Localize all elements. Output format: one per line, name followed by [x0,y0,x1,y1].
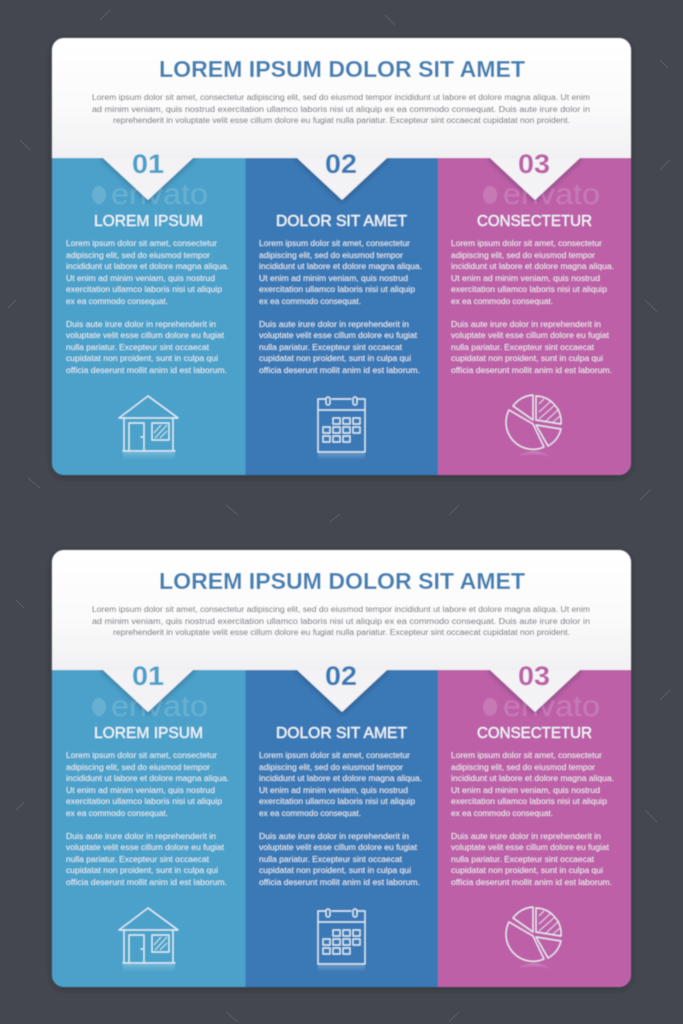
card 2 base [52,550,631,987]
column 1 body text: incididunt ut labore et dolore magna aliqua. [66,774,229,783]
column 1 body text: ex ea commodo consequat. [66,297,168,306]
column 1 heading: LOREM IPSUM [94,725,203,742]
column 1 body text: Lorem ipsum dolor sit amet, consectetur [66,239,217,248]
column 1 body text [66,239,229,375]
pointer 1 [103,662,193,712]
column 1 body text: voluptate velit esse cillum dolore eu fugiat [66,331,225,340]
column 1 body text: ex ea commodo consequat. [66,809,168,818]
title: LOREM IPSUM DOLOR SIT AMET [159,568,526,594]
column 2 body text: ex ea commodo consequat. [259,809,361,818]
icon: pie chart [506,907,561,970]
number 01: 01 [132,661,164,691]
header panel [52,550,631,670]
icon: calendar [318,909,365,972]
column 1 body text: exercitation ullamco laboris nisi ut aliquip [66,285,223,294]
column 2 heading: DOLOR SIT AMET [276,213,407,230]
title: LOREM IPSUM DOLOR SIT AMET [159,56,526,82]
pointer 3 [490,150,580,200]
column 1 body text: Ut enim ad minim veniam, quis nostrud [66,274,215,283]
column 1 body text: cupidatat non proident, sunt in culpa qui [66,866,218,875]
column 1 heading: LOREM IPSUM [94,213,203,230]
number 03: 03 [518,149,550,179]
column 3 body text: ex ea commodo consequat. [451,297,553,306]
column 3 body text: officia deserunt mollit anim id est laborum. [451,878,612,887]
column 3 body text: exercitation ullamco laboris nisi ut aliquip [451,797,608,806]
column 2 body text: adipiscing elit, sed do eiusmod tempor [259,251,403,260]
column 2 body text: cupidatat non proident, sunt in culpa qui [259,354,411,363]
icon: pie chart [506,395,561,458]
column 1 body text: incididunt ut labore et dolore magna aliqua. [66,262,229,271]
column 2 body text: Duis aute irure dolor in reprehenderit in [259,832,409,841]
column 2 body text [259,751,422,887]
column 1 body text: Ut enim ad minim veniam, quis nostrud [66,786,215,795]
icon: house [119,396,178,460]
pointer 3 [490,662,580,712]
column 3 body text: voluptate velit esse cillum dolore eu fugiat [451,843,610,852]
intro text: ad minim veniam, quis nostrud exercitation ullamco laboris nisi ut aliquip ex ea commodo consequat. Duis aute irure dolor in [92,105,590,114]
column 3 body text: cupidatat non proident, sunt in culpa qui [451,866,603,875]
column 2 body text: officia deserunt mollit anim id est laborum. [259,878,420,887]
column 2 body text: Duis aute irure dolor in reprehenderit in [259,320,409,329]
icon: calendar [318,397,365,460]
number 03: 03 [518,661,550,691]
column 1 body text: adipiscing elit, sed do eiusmod tempor [66,251,210,260]
column 2 body text: incididunt ut labore et dolore magna aliqua. [259,262,422,271]
watermark 3: envato [503,690,600,723]
column 3 body text: ex ea commodo consequat. [451,809,553,818]
column 1 body text: Lorem ipsum dolor sit amet, consectetur [66,751,217,760]
column 2 body text: Lorem ipsum dolor sit amet, consectetur [259,239,410,248]
intro text: ad minim veniam, quis nostrud exercitation ullamco laboris nisi ut aliquip ex ea commodo consequat. Duis aute irure dolor in [92,617,590,626]
column 2 body text: adipiscing elit, sed do eiusmod tempor [259,763,403,772]
number 01: 01 [132,149,164,179]
column 1 background [52,150,246,475]
column 3 body text: Ut enim ad minim veniam, quis nostrud [451,274,600,283]
column 3 body text: officia deserunt mollit anim id est laborum. [451,366,612,375]
column 1 body text: Duis aute irure dolor in reprehenderit in [66,832,216,841]
column 3 body text: adipiscing elit, sed do eiusmod tempor [451,763,595,772]
column 3 body text: Lorem ipsum dolor sit amet, consectetur [451,751,602,760]
intro text [92,93,590,125]
column 3 body text: voluptate velit esse cillum dolore eu fugiat [451,331,610,340]
column 2 body text: ex ea commodo consequat. [259,297,361,306]
column 3 heading: CONSECTETUR [477,725,592,742]
column 1 body text: Duis aute irure dolor in reprehenderit in [66,320,216,329]
watermark 1: envato [111,690,208,723]
intro text [92,605,590,637]
number 02: 02 [325,661,357,691]
icon: house [119,908,178,972]
column 2 background [246,662,438,987]
column 2 body text: incididunt ut labore et dolore magna aliqua. [259,774,422,783]
column 2 body text: officia deserunt mollit anim id est laborum. [259,366,420,375]
column 3 body text: Ut enim ad minim veniam, quis nostrud [451,786,600,795]
column 3 heading: CONSECTETUR [477,213,592,230]
column 1 body text: adipiscing elit, sed do eiusmod tempor [66,763,210,772]
panel: infographic card 2 [52,550,631,987]
column 1 body text: officia deserunt mollit anim id est laborum. [66,366,227,375]
intro text: reprehenderit in voluptate velit esse cillum dolore eu fugiat nulla pariatur. Excepteur sint occaecat cupidatat non proident. [113,116,570,125]
column 2 body text: voluptate velit esse cillum dolore eu fugiat [259,331,418,340]
column 3 body text: nulla pariatur. Excepteur sint occaecat [451,855,595,864]
column 3 body text: adipiscing elit, sed do eiusmod tempor [451,251,595,260]
watermark 1: envato [111,178,208,211]
column 2 body text: Ut enim ad minim veniam, quis nostrud [259,274,408,283]
column 3 body text: Duis aute irure dolor in reprehenderit in [451,832,601,841]
column 2 body text: exercitation ullamco laboris nisi ut aliquip [259,285,416,294]
column 2 body text: cupidatat non proident, sunt in culpa qui [259,866,411,875]
pointer 2 [297,150,387,200]
column 2 body text: nulla pariatur. Excepteur sint occaecat [259,855,403,864]
column 2 body text: voluptate velit esse cillum dolore eu fugiat [259,843,418,852]
column 2 body text: Ut enim ad minim veniam, quis nostrud [259,786,408,795]
column 3 body text [451,239,614,375]
column 3 background [438,662,631,987]
header panel [52,38,631,158]
number 02: 02 [325,149,357,179]
column 2 background [246,150,438,475]
column 1 body text: voluptate velit esse cillum dolore eu fugiat [66,843,225,852]
column 3 body text: cupidatat non proident, sunt in culpa qui [451,354,603,363]
pointer 2 [297,662,387,712]
intro text: Lorem ipsum dolor sit amet, consectetur adipiscing elit, sed do eiusmod tempor incididunt ut labore et dolore magna aliqua. Ut enim [92,93,590,102]
column 2 heading: DOLOR SIT AMET [276,725,407,742]
card 1 base [52,38,631,475]
intro text: Lorem ipsum dolor sit amet, consectetur adipiscing elit, sed do eiusmod tempor incididunt ut labore et dolore magna aliqua. Ut enim [92,605,590,614]
column 3 background [438,150,631,475]
pointer 1 [103,150,193,200]
watermark 3: envato [503,178,600,211]
column 3 body text: exercitation ullamco laboris nisi ut aliquip [451,285,608,294]
panel: infographic card 1 [52,38,631,475]
column 1 body text: officia deserunt mollit anim id est laborum. [66,878,227,887]
intro text: reprehenderit in voluptate velit esse cillum dolore eu fugiat nulla pariatur. Excepteur sint occaecat cupidatat non proident. [113,628,570,637]
column 1 background [52,662,246,987]
column 3 body text: incididunt ut labore et dolore magna aliqua. [451,262,614,271]
column 3 body text [451,751,614,887]
column 2 body text: nulla pariatur. Excepteur sint occaecat [259,343,403,352]
column 1 body text: nulla pariatur. Excepteur sint occaecat [66,855,210,864]
column 2 body text [259,239,422,375]
column 1 body text: exercitation ullamco laboris nisi ut aliquip [66,797,223,806]
column 3 body text: Lorem ipsum dolor sit amet, consectetur [451,239,602,248]
column 3 body text: nulla pariatur. Excepteur sint occaecat [451,343,595,352]
column 1 body text: nulla pariatur. Excepteur sint occaecat [66,343,210,352]
column 1 body text: cupidatat non proident, sunt in culpa qui [66,354,218,363]
column 2 body text: exercitation ullamco laboris nisi ut aliquip [259,797,416,806]
column 3 body text: Duis aute irure dolor in reprehenderit in [451,320,601,329]
column 2 body text: Lorem ipsum dolor sit amet, consectetur [259,751,410,760]
column 1 body text [66,751,229,887]
column 3 body text: incididunt ut labore et dolore magna aliqua. [451,774,614,783]
